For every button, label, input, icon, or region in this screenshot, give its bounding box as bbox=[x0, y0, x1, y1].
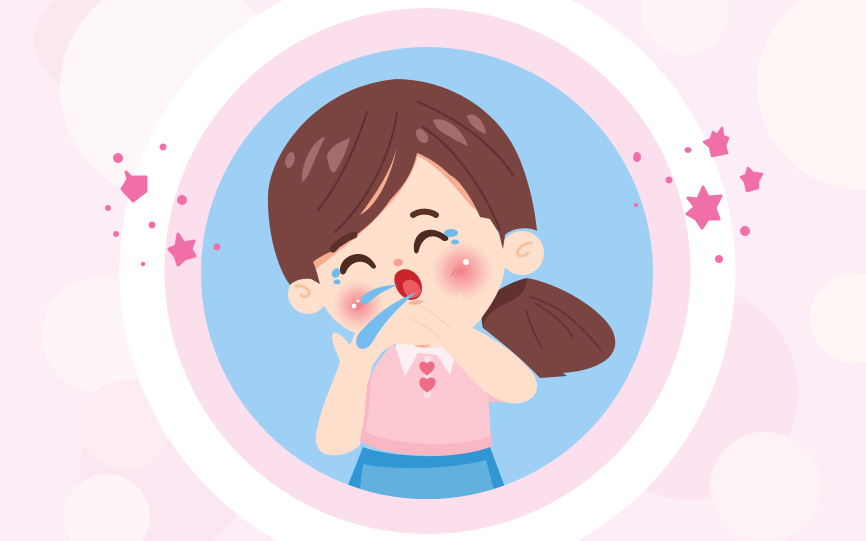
nose bbox=[394, 259, 403, 266]
left eyebrow bbox=[333, 235, 354, 249]
hair bbox=[268, 79, 537, 285]
blue inner circle bbox=[201, 47, 653, 499]
thumb shadow bbox=[408, 300, 424, 305]
virus star right top bbox=[704, 128, 728, 156]
blue skirt bbox=[348, 447, 504, 499]
cheek sparkles bbox=[352, 259, 469, 308]
heart buttons bbox=[420, 362, 434, 375]
virus star left upper bbox=[122, 172, 146, 201]
white outer ring bbox=[120, 0, 735, 541]
eyebrow right bbox=[413, 212, 436, 215]
hair highlights bbox=[302, 137, 350, 182]
right ear bbox=[500, 231, 544, 275]
eye right bbox=[414, 230, 448, 253]
pink middle ring bbox=[164, 8, 690, 534]
cheek blush left bbox=[332, 279, 384, 331]
tears on eyes bbox=[330, 229, 459, 284]
left ear bbox=[288, 274, 328, 314]
placket bbox=[424, 356, 431, 398]
ponytail bbox=[482, 278, 615, 378]
finger lines bbox=[408, 305, 450, 340]
virus star left lower bbox=[169, 234, 195, 265]
germ dots left bbox=[105, 144, 220, 266]
right hand and forearm covering mouth bbox=[395, 293, 537, 403]
cheek marks bbox=[350, 268, 461, 310]
face bbox=[312, 153, 505, 345]
girl character bbox=[268, 79, 615, 510]
neck bbox=[396, 330, 460, 353]
left forearm and hand bbox=[316, 313, 398, 455]
germ dots right bbox=[633, 147, 750, 263]
fringe shadow bbox=[312, 150, 482, 270]
sneeze spray bbox=[356, 285, 417, 349]
right germ cluster bbox=[633, 128, 762, 263]
cheek blush right bbox=[430, 240, 494, 302]
fringe gap bbox=[360, 146, 397, 215]
virus star right middle bbox=[741, 168, 762, 191]
virus star right large bbox=[687, 187, 721, 228]
collar neck shadow bbox=[408, 338, 432, 348]
collar bbox=[395, 339, 456, 376]
hair strands bbox=[318, 102, 513, 232]
eye left bbox=[340, 254, 376, 274]
left germ cluster bbox=[105, 144, 220, 266]
mouth bbox=[394, 269, 422, 300]
sleeve back bbox=[470, 380, 505, 402]
pink shirt bbox=[360, 338, 492, 456]
